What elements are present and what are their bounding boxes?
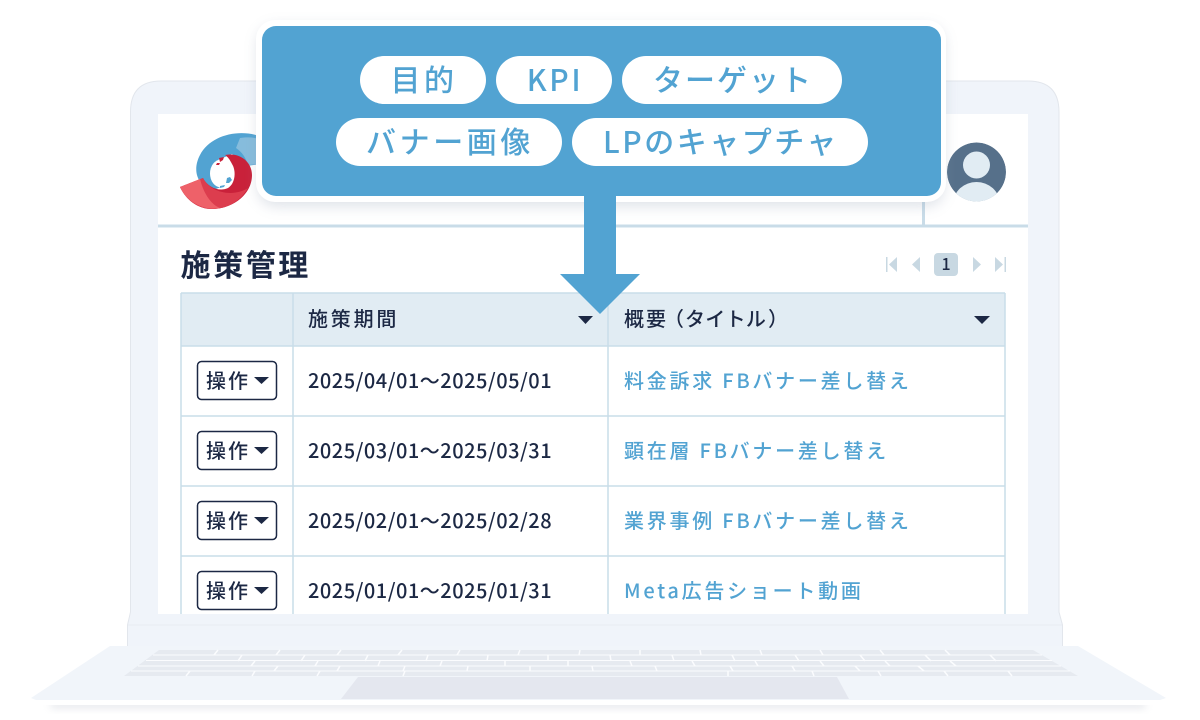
laptop lid	[128, 81, 1062, 646]
table header	[181, 293, 1005, 346]
row 4: Meta広告ショート動画	[624, 575, 864, 604]
tag: ターゲット: ターゲット	[653, 56, 813, 100]
row 4: 2025/01/01〜2025/01/31	[308, 575, 552, 604]
table header: 概要	[624, 303, 668, 332]
callout	[256, 20, 946, 206]
row 4	[198, 572, 864, 610]
table grid	[181, 293, 1005, 614]
arrow	[560, 196, 640, 314]
row 3: 操作	[206, 505, 250, 534]
user avatar	[947, 142, 1006, 202]
tag: 目的	[360, 56, 486, 104]
row 1: 料金訴求 FBバナー差し替え	[624, 365, 912, 394]
tag: バナー画像: バナー画像	[366, 118, 534, 162]
row 2	[198, 432, 889, 470]
app header divider	[158, 202, 1028, 228]
pagination: 1	[941, 251, 951, 275]
row 1: 2025/04/01〜2025/05/01	[308, 365, 552, 394]
page title: 施策管理	[180, 241, 311, 285]
tag: KPI	[496, 56, 612, 104]
row 1	[198, 362, 912, 400]
tag: ターゲット	[622, 56, 842, 104]
row 2: 2025/03/01〜2025/03/31	[308, 435, 552, 464]
row 3: 業界事例 FBバナー差し替え	[624, 505, 912, 534]
row 4: 操作	[206, 575, 250, 604]
trackpad	[341, 677, 849, 699]
laptop base	[31, 646, 1166, 708]
tag: LPのキャプチャ: LPのキャプチャ	[603, 118, 839, 162]
tag: バナー画像	[336, 118, 562, 166]
pagination	[886, 251, 1006, 276]
row 2: 操作	[206, 435, 250, 464]
row 2: 顕在層 FBバナー差し替え	[624, 435, 889, 464]
keyboard	[124, 650, 1078, 676]
tag: KPI: KPI	[527, 56, 583, 100]
table header: 施策期間	[308, 303, 399, 332]
tag: 目的: 目的	[390, 56, 458, 100]
table header: タイトル	[685, 303, 766, 332]
table header: （	[664, 303, 684, 332]
table header: ）	[768, 303, 788, 332]
row 1: 操作	[206, 365, 250, 394]
row 3: 2025/02/01〜2025/02/28	[308, 505, 552, 534]
table	[181, 293, 1005, 614]
row 3	[198, 502, 912, 540]
logo	[180, 133, 262, 209]
screen	[158, 114, 1028, 614]
